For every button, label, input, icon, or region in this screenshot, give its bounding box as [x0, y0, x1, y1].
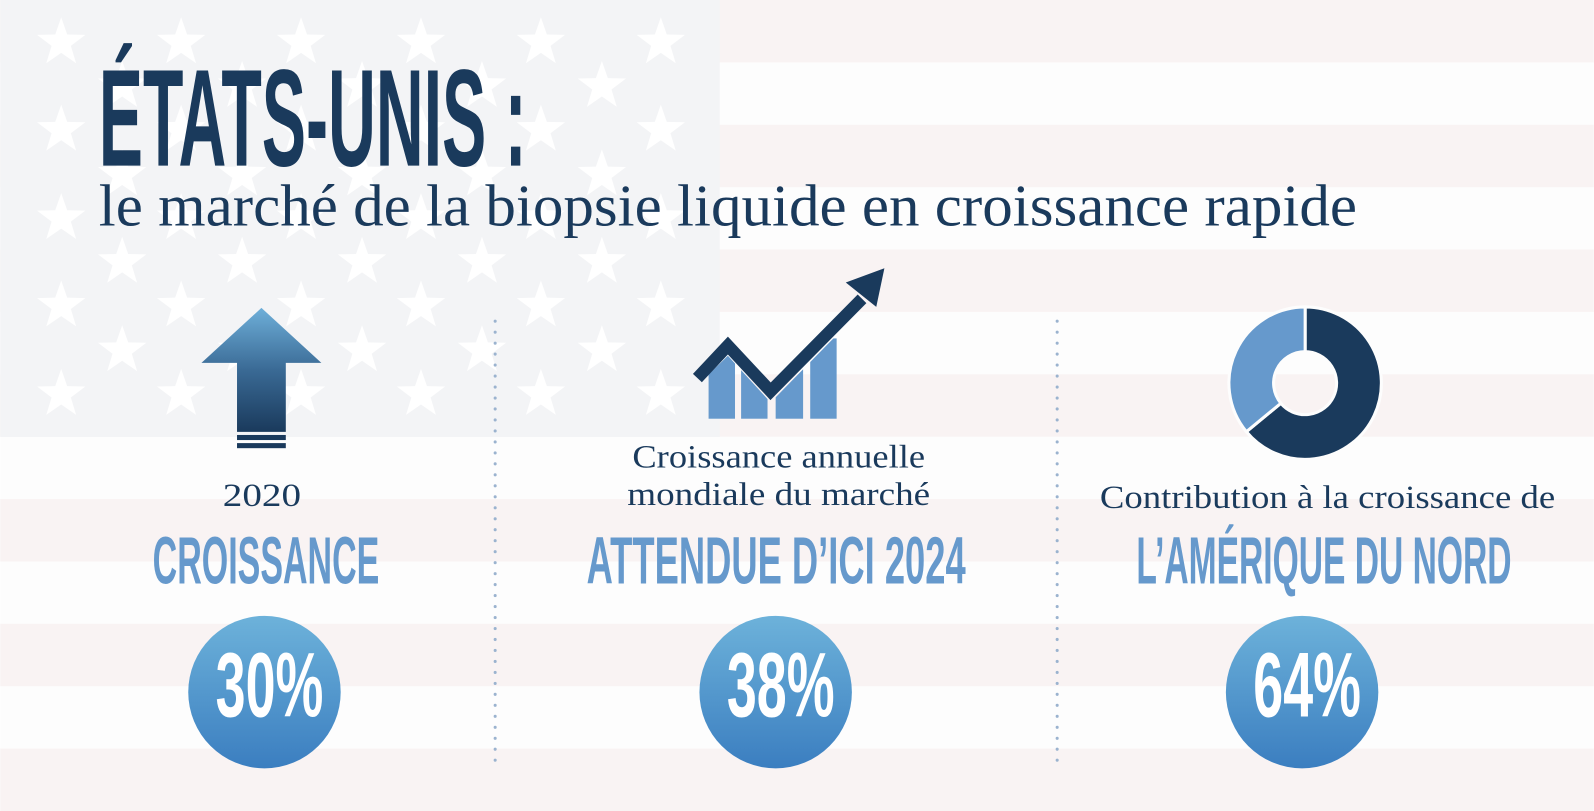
- text: ÉTATS-UNIS :: [99, 42, 527, 196]
- panel: annual growth 2024: mondiale du marché: [627, 477, 930, 513]
- text: 2020: 2020: [223, 478, 301, 514]
- circle: 30%: [188, 616, 341, 768]
- panel: North America contribution: [1100, 307, 1555, 768]
- circle: 64%: 64%: [1253, 634, 1361, 736]
- heading: CROISSANCE: CROISSANCE: [153, 523, 379, 598]
- icon: growth chart: [697, 268, 884, 419]
- circle: 38%: [699, 616, 852, 768]
- text: annual growth label: Croissance annuelle: [632, 439, 925, 475]
- circle: 30%: 30%: [216, 634, 323, 736]
- heading: ATTENDUE D'ICI 2024: ATTENDUE D’ICI 2024: [587, 523, 966, 598]
- circle: 38%: 38%: [727, 634, 835, 736]
- icon: donut chart: [1229, 307, 1381, 459]
- circle: 64%: [1226, 616, 1378, 768]
- panel: 2020 growth: [153, 308, 379, 768]
- panel: annual growth 2024: [587, 268, 966, 768]
- subtitle: le marché de la biopsie liquide en croissance rapide: [99, 173, 1357, 239]
- text: contribution label: Contribution à la croissance de: [1100, 480, 1555, 516]
- icon: up arrow: [201, 308, 321, 448]
